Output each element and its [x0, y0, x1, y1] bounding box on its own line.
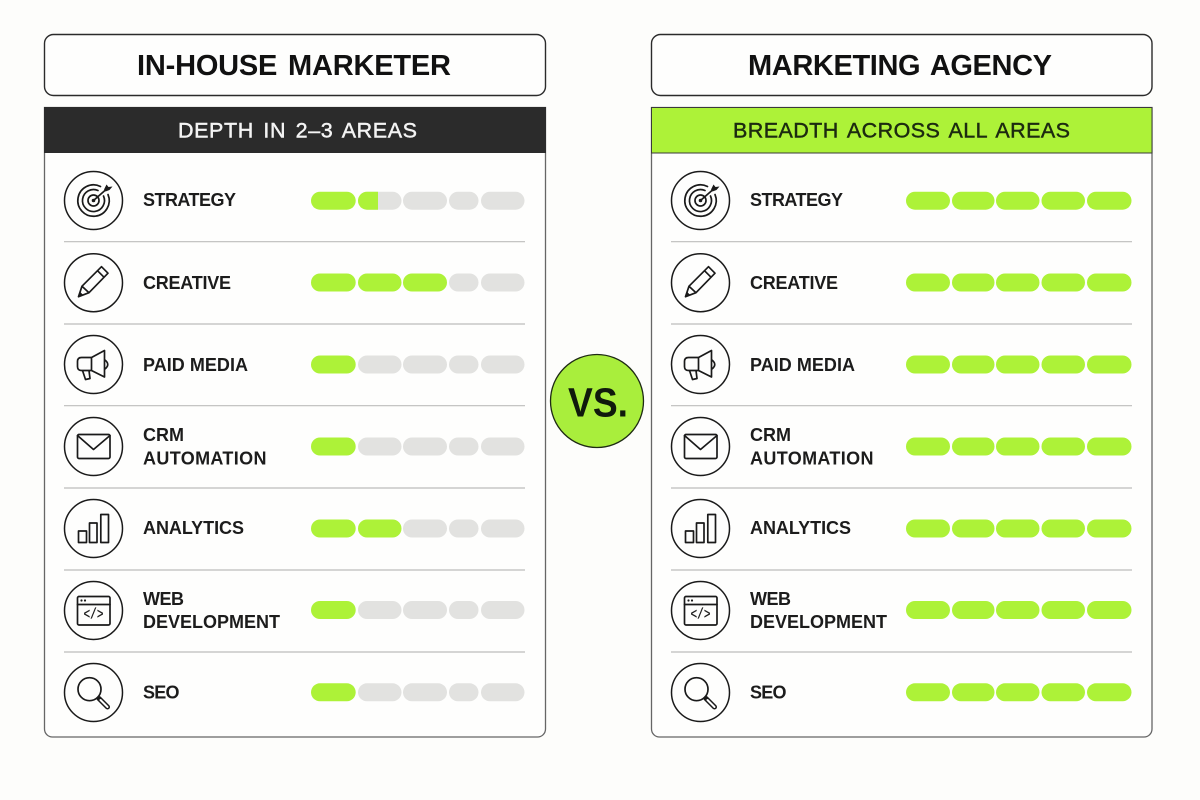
subheading banner: depth — [44, 107, 546, 153]
panel: in-house marketer — [44, 34, 546, 737]
row: crm automation: CRM — [143, 425, 184, 445]
vs badge: VS. — [568, 380, 628, 426]
row: seo: SEO — [750, 682, 786, 702]
row: crm automation: CRM — [750, 425, 791, 445]
icon: target — [672, 172, 730, 230]
rating: 5 of 5 — [906, 356, 1132, 374]
rating: 1 of 5 — [311, 601, 524, 619]
icon: pencil — [64, 254, 122, 312]
rating: 5 of 5 — [906, 601, 1132, 619]
rating: 2 of 5 — [311, 520, 524, 538]
row: seo — [672, 664, 1132, 722]
rating: 5 of 5 — [906, 683, 1132, 701]
row: creative: CREATIVE — [750, 273, 838, 293]
rating: 5 of 5 — [906, 520, 1132, 538]
subheading banner: breadth: BREADTH ACROSS ALL AREAS — [733, 118, 1070, 142]
title box: in-house marketer: IN-HOUSE MARKETER — [137, 50, 451, 82]
card body — [652, 108, 1152, 737]
rating: 1 of 5 — [311, 356, 524, 374]
row: strategy — [64, 172, 524, 230]
icon: magnifier — [64, 664, 122, 722]
rating: 5 of 5 — [906, 438, 1132, 456]
icon: megaphone — [64, 336, 122, 394]
row: crm automation — [672, 418, 1132, 476]
rating: 1.5 of 5 — [311, 192, 524, 210]
row: paid media — [672, 336, 1132, 394]
row: strategy: STRATEGY — [143, 190, 236, 210]
panel: marketing agency — [652, 34, 1152, 737]
row: creative: CREATIVE — [143, 273, 231, 293]
icon: browser code: </> — [84, 606, 104, 624]
row: seo — [64, 664, 524, 722]
rating: 1 of 5 — [311, 683, 524, 701]
row: web development: WEB — [750, 589, 791, 609]
icon: browser code — [672, 582, 730, 640]
icon: browser code: </> — [690, 606, 710, 624]
vs badge — [550, 354, 644, 448]
subheading banner: breadth — [652, 108, 1152, 153]
row: analytics — [672, 500, 1132, 558]
row: analytics — [64, 500, 524, 558]
rating: 5 of 5 — [906, 274, 1132, 292]
icon: envelope — [672, 418, 730, 476]
row: paid media — [64, 336, 524, 394]
title box: marketing agency — [652, 34, 1152, 96]
icon: megaphone — [672, 336, 730, 394]
row: paid media: PAID MEDIA — [143, 355, 248, 375]
icon: envelope — [64, 418, 122, 476]
row: web development: WEB — [143, 589, 184, 609]
title box: marketing agency: MARKETING AGENCY — [748, 50, 1052, 82]
icon: bar chart — [64, 500, 122, 558]
row: crm automation: AUTOMATION — [143, 449, 266, 469]
row: web development: DEVELOPMENT — [750, 612, 887, 632]
icon: target — [64, 172, 122, 230]
rating: 1 of 5 — [311, 438, 524, 456]
row: creative — [672, 254, 1132, 312]
row: creative — [64, 254, 524, 312]
rating: 5 of 5 — [906, 192, 1132, 210]
icon: pencil — [672, 254, 730, 312]
icon: magnifier — [672, 664, 730, 722]
row: strategy — [672, 172, 1132, 230]
subheading banner: depth: DEPTH IN 2–3 AREAS — [178, 118, 417, 142]
row: analytics: ANALYTICS — [750, 518, 851, 538]
row: paid media: PAID MEDIA — [750, 355, 855, 375]
row: crm automation: AUTOMATION — [750, 449, 874, 469]
title box: in-house marketer — [44, 34, 546, 96]
row: web development — [64, 582, 524, 640]
icon: bar chart — [672, 500, 730, 558]
rating: 3 of 5 — [311, 274, 524, 292]
row: web development — [672, 582, 1132, 640]
row: strategy: STRATEGY — [750, 190, 843, 210]
icon: browser code — [64, 582, 122, 640]
row: crm automation — [64, 418, 524, 476]
row: web development: DEVELOPMENT — [143, 612, 280, 632]
row: analytics: ANALYTICS — [143, 518, 244, 538]
row: seo: SEO — [143, 682, 180, 702]
card body — [44, 108, 546, 737]
